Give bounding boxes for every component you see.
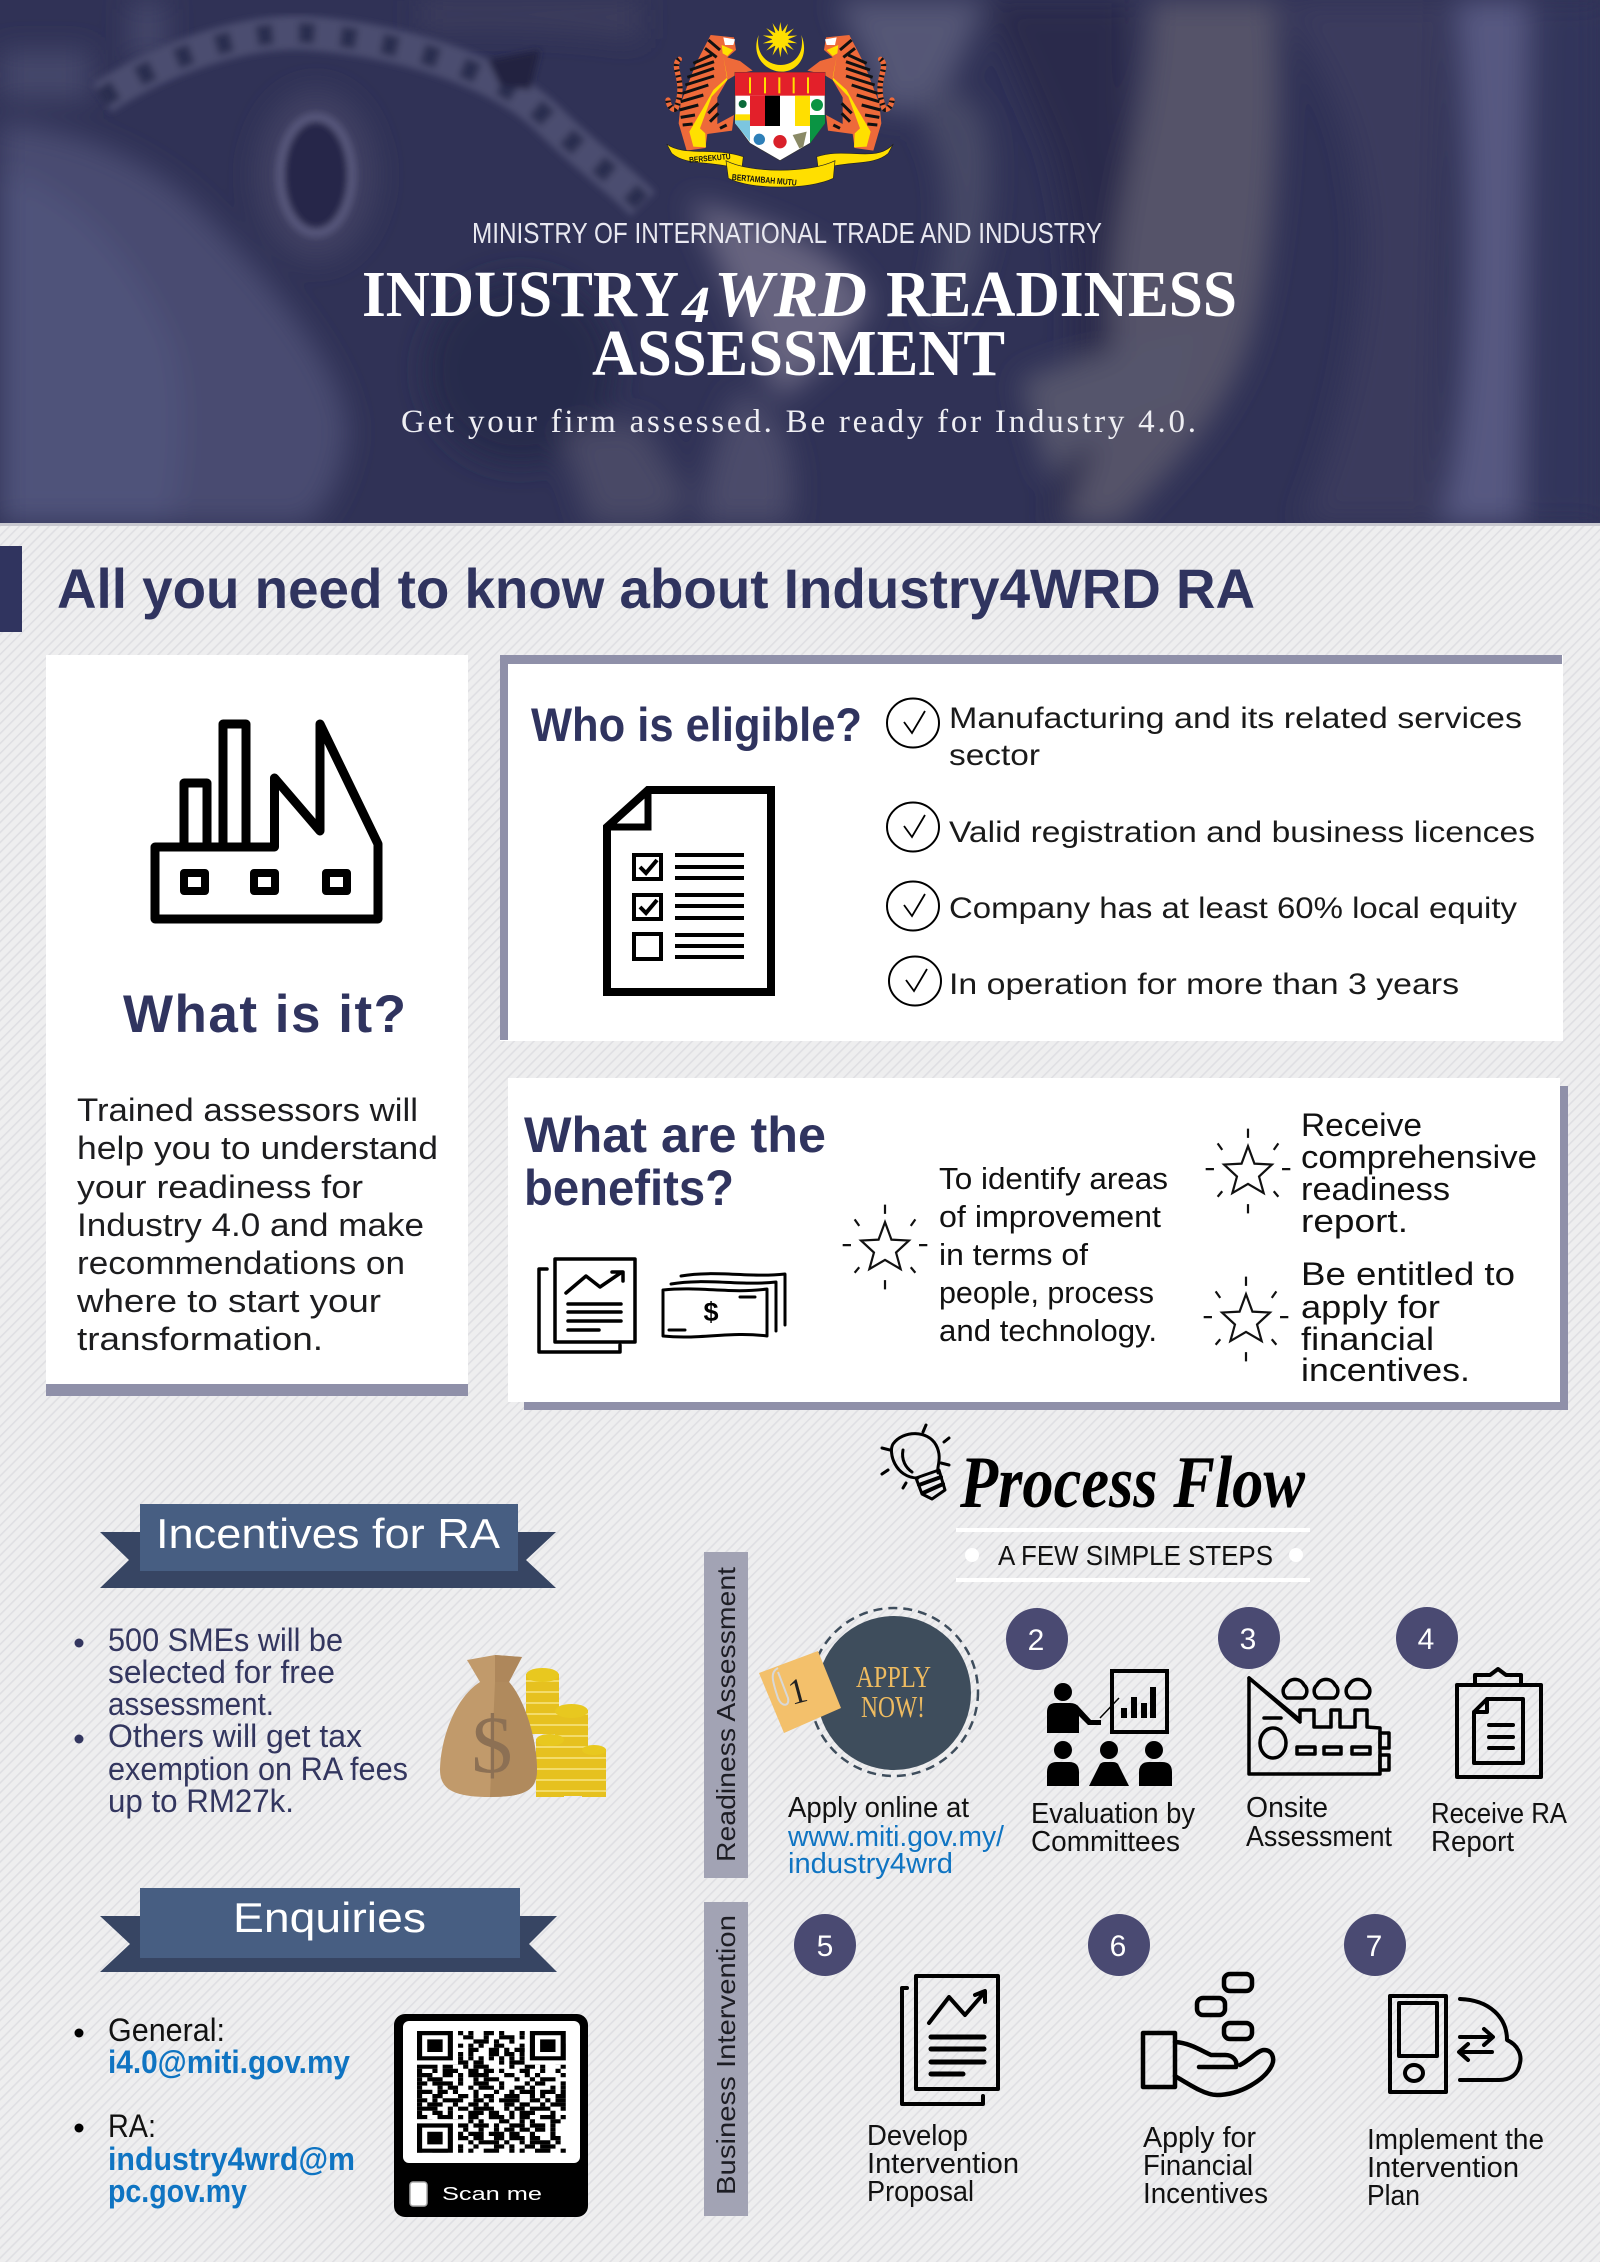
sidebar: business intervention: Business Intervention — [711, 1915, 741, 2195]
text: what is it description — [76, 1092, 438, 1357]
icon: money bag and coins: $ — [472, 1699, 512, 1790]
heading: what is it: What is it? — [123, 985, 406, 1044]
heading: benefits — [524, 1107, 826, 1216]
motto ribbons — [667, 144, 893, 188]
icon: evaluation by committees — [1047, 1671, 1172, 1786]
criterion: years in operation: In operation for more than 3 years — [949, 968, 1459, 1001]
text: what is it description: your readiness for — [77, 1169, 363, 1205]
text: step 6: Financial — [1143, 2150, 1253, 2182]
icon: financial incentives hand with coins — [1143, 1974, 1273, 2095]
enquiries ribbon: Enquiries — [233, 1894, 426, 1941]
scan me label: Scan me — [442, 2184, 542, 2204]
incentives list: exemption on RA fees — [108, 1751, 408, 1787]
text: step 5: Proposal — [867, 2176, 974, 2208]
text: benefit 1: people, process — [939, 1275, 1154, 1310]
text: step 1: www.miti.gov.my/ — [787, 1821, 1005, 1853]
text: step 1 — [787, 1792, 1005, 1880]
title — [362, 258, 1237, 390]
text: step 5: Develop — [867, 2120, 968, 2152]
criterion: local equity — [887, 882, 1517, 930]
enquiries list: pc.gov.my — [108, 2173, 247, 2209]
text: benefit 3: Be entitled to — [1301, 1256, 1515, 1292]
text: benefit 1: and technology. — [939, 1313, 1157, 1348]
shield — [735, 72, 825, 161]
title: READINESS — [886, 258, 1237, 331]
text: benefit 1 — [939, 1161, 1168, 1348]
incentives list: Others will get tax — [108, 1718, 362, 1754]
incentives list: selected for free — [108, 1654, 335, 1690]
incentives list — [74, 1622, 408, 1819]
text: benefit 2: Receive — [1301, 1107, 1422, 1143]
step 1: apply now: APPLY — [856, 1659, 931, 1694]
process flow heading: Process Flow — [959, 1442, 1306, 1524]
icon: star 3 — [1204, 1277, 1288, 1361]
step 7 badge — [1344, 1914, 1406, 1976]
text: benefit 1: in terms of — [939, 1237, 1088, 1272]
step 2 badge: 2 — [1028, 1624, 1044, 1657]
text: step 5: Intervention — [867, 2148, 1019, 2180]
enquiries list: RA: — [108, 2108, 156, 2144]
motto ribbons: BERTAMBAH MUTU — [731, 172, 797, 188]
icon: star 1 — [843, 1205, 927, 1289]
right tiger — [807, 35, 892, 151]
step 6 badge: 6 — [1110, 1930, 1126, 1963]
text: step 2 — [1031, 1798, 1195, 1858]
criterion: registration: Valid registration and business licences — [949, 816, 1535, 849]
sidebar: business intervention — [704, 1902, 748, 2216]
title: ASSESSMENT — [592, 317, 1005, 390]
panel: benefits — [508, 1078, 1568, 1410]
text: step 2: Evaluation by — [1031, 1798, 1195, 1830]
text: step 2: Committees — [1031, 1826, 1180, 1858]
criterion: years in operation — [889, 956, 1459, 1006]
left tiger — [668, 35, 753, 151]
icon: Malaysian coat of arms — [667, 22, 893, 188]
subheading: a few simple steps — [956, 1528, 1310, 1582]
incentives list: 500 SMEs will be — [108, 1622, 343, 1658]
text: benefit 1: of improvement — [939, 1199, 1161, 1234]
icon: star 2 — [1206, 1129, 1290, 1213]
panel: what is it — [46, 655, 468, 1396]
icon: banknotes — [663, 1274, 785, 1337]
text: step 3: Onsite — [1246, 1792, 1328, 1824]
text: what is it description: help you to understand — [77, 1130, 438, 1166]
text: benefit 3 — [1301, 1256, 1515, 1388]
text: benefit 2: report. — [1301, 1203, 1408, 1239]
QR modules — [417, 2031, 566, 2153]
step 1: apply now: NOW! — [861, 1689, 925, 1724]
incentives ribbon — [100, 1504, 556, 1588]
federal star — [762, 22, 798, 57]
header bottom edge — [0, 523, 1600, 526]
text: step 6: Incentives — [1143, 2178, 1268, 2210]
icon: intervention proposal — [902, 1976, 998, 2104]
step 7 badge: 7 — [1366, 1930, 1382, 1963]
title: WRD — [714, 258, 867, 331]
step 6 badge — [1088, 1914, 1150, 1976]
step 3 badge — [1218, 1607, 1280, 1669]
text: benefit 2 — [1301, 1107, 1537, 1239]
enquiries list: industry4wrd@m — [108, 2141, 355, 2177]
criterion: local equity: Company has at least 60% local equity — [949, 892, 1517, 925]
criterion: manufacturing: sector — [949, 739, 1040, 772]
text: step 1: industry4wrd — [788, 1848, 953, 1880]
text: what is it description: transformation. — [77, 1321, 323, 1357]
heading: benefits: benefits? — [524, 1160, 734, 1216]
sidebar: readiness assessment — [704, 1552, 748, 1878]
enquiries list: General: — [108, 2012, 225, 2048]
step 1: apply now — [759, 1608, 978, 1776]
icon: implementation device and cloud — [1390, 1996, 1520, 2092]
step 3 badge: 3 — [1240, 1623, 1256, 1656]
heading: benefits: What are the — [524, 1107, 826, 1163]
text: step 5 — [867, 2120, 1019, 2208]
title: INDUSTRY — [362, 258, 679, 331]
tagline: Get your firm assessed. Be ready for Industry 4.0. — [401, 404, 1196, 440]
incentives list: up to RM27k. — [108, 1783, 294, 1819]
icon: money bag and coins — [440, 1655, 606, 1797]
incentives list: assessment. — [108, 1686, 274, 1722]
text: benefit 3: apply for — [1301, 1289, 1440, 1325]
step 2 badge — [1006, 1608, 1068, 1670]
panel: who is eligible — [500, 655, 1563, 1041]
section heading: All you need to know about Industry4WRD RA — [57, 557, 1255, 620]
text: step 4 — [1431, 1798, 1568, 1858]
criterion: manufacturing: Manufacturing and its related services — [949, 702, 1522, 735]
text: step 1: Apply online at — [788, 1792, 969, 1824]
icon: banknotes: $ — [703, 1297, 719, 1327]
step 5 badge — [794, 1914, 856, 1976]
header photo background — [0, 0, 1600, 524]
step 1: apply now: 1 — [784, 1669, 811, 1713]
icon: factory — [155, 724, 378, 919]
text: benefit 2: readiness — [1301, 1171, 1450, 1207]
text: step 3: Assessment — [1246, 1821, 1392, 1853]
heading: who is eligible: Who is eligible? — [531, 698, 862, 751]
sidebar: readiness assessment: Readiness Assessment — [711, 1566, 741, 1862]
icon: onsite factory — [1249, 1678, 1389, 1774]
motto ribbons: BERSEKUTU — [689, 152, 731, 165]
text: step 4: Receive RA — [1431, 1798, 1568, 1830]
icon: light bulb — [882, 1425, 949, 1499]
crescent — [756, 35, 804, 72]
criterion: manufacturing — [887, 698, 1522, 772]
text: what is it description: Industry 4.0 and make — [77, 1207, 424, 1243]
text: what is it description: where to start your — [76, 1283, 381, 1319]
step 4 badge: 4 — [1418, 1623, 1434, 1656]
text: step 6 — [1143, 2122, 1268, 2210]
criterion: registration — [887, 802, 1535, 852]
text: step 6: Apply for — [1143, 2122, 1256, 2154]
text: step 7: Intervention — [1367, 2152, 1519, 2184]
text: benefit 3: incentives. — [1301, 1352, 1470, 1388]
text: benefit 3: financial — [1301, 1321, 1434, 1357]
text: what is it description: Trained assessors will — [77, 1092, 418, 1128]
enquiries list: i4.0@miti.gov.my — [108, 2044, 350, 2080]
icon: checklist document — [607, 790, 771, 992]
subheading: a few simple steps: A FEW SIMPLE STEPS — [998, 1540, 1273, 1571]
section heading — [0, 546, 1255, 632]
QR code card — [394, 2014, 588, 2217]
icon: RA report clipboard — [1457, 1669, 1541, 1777]
icon: chart report — [539, 1259, 635, 1352]
incentives ribbon: Incentives for RA — [156, 1510, 500, 1557]
scan me label — [410, 2182, 542, 2206]
text: step 3 — [1246, 1792, 1392, 1853]
enquiries list — [74, 2012, 355, 2209]
step 4 badge — [1396, 1607, 1458, 1669]
header: ministry name: MINISTRY OF INTERNATIONAL TRADE AND INDUSTRY — [472, 218, 1102, 250]
enquiries ribbon — [100, 1888, 557, 1972]
text: step 7 — [1367, 2124, 1544, 2212]
title: 4 — [681, 277, 710, 334]
text: step 7: Implement the — [1367, 2124, 1544, 2156]
text: benefit 2: comprehensive — [1301, 1139, 1537, 1175]
step 5 badge: 5 — [817, 1930, 833, 1963]
text: step 4: Report — [1431, 1826, 1514, 1858]
text: what is it description: recommendations on — [77, 1245, 405, 1281]
text: step 7: Plan — [1367, 2180, 1420, 2212]
text: benefit 1: To identify areas — [939, 1161, 1168, 1196]
